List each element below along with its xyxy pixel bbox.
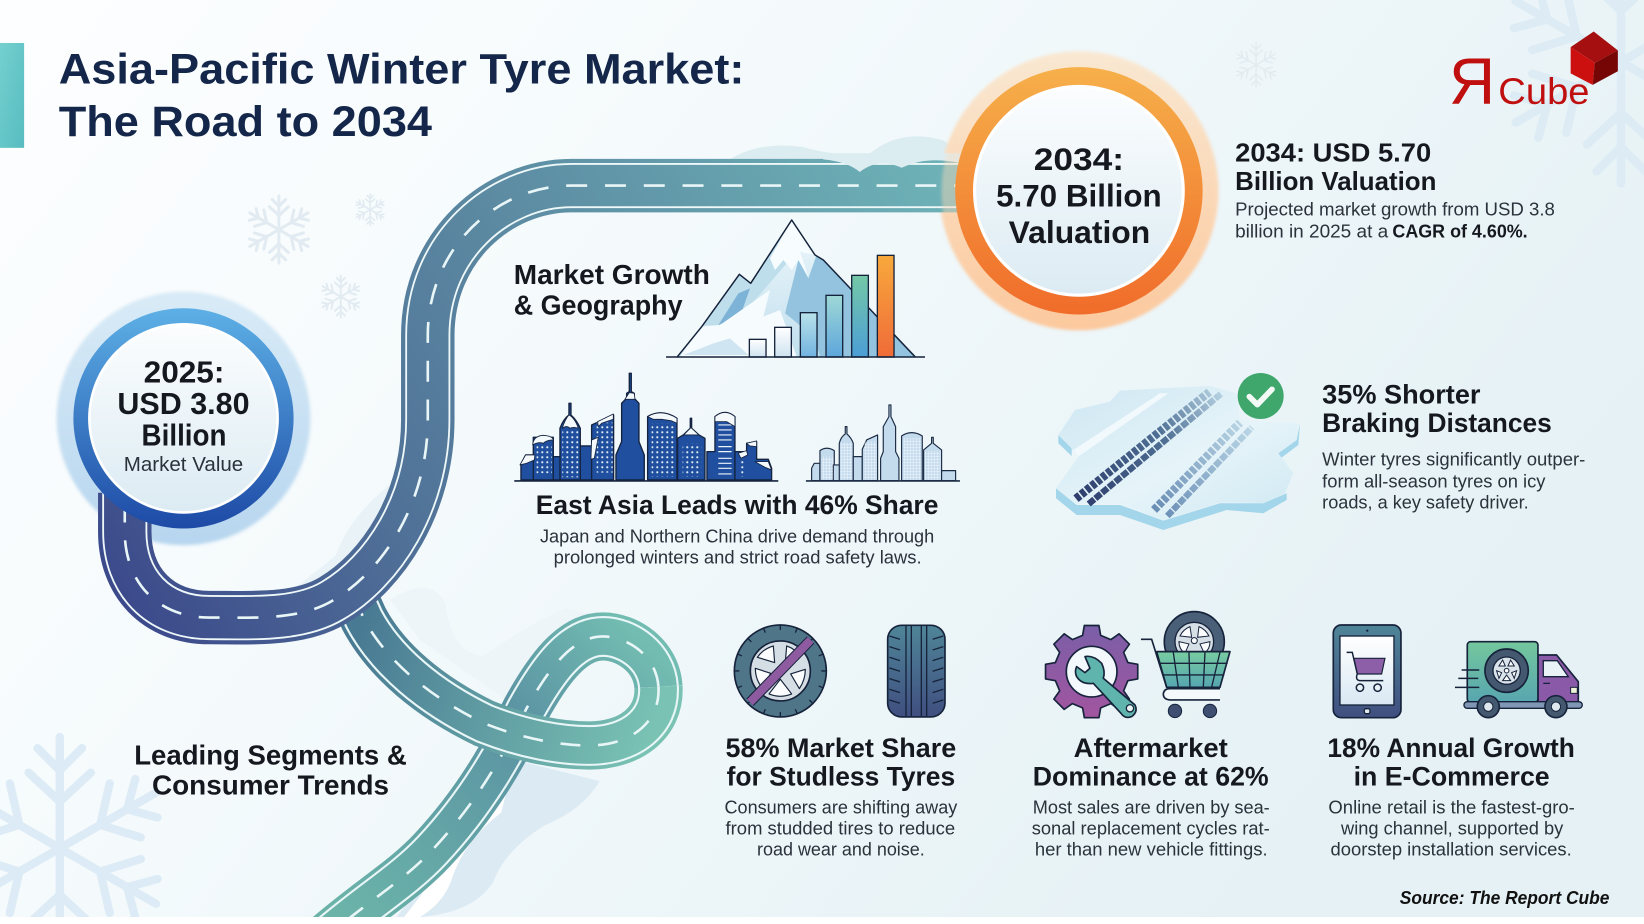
bottom white strip [0, 917, 1644, 924]
text block: 2034 valuation [1235, 137, 1555, 241]
logo: Я [1449, 44, 1495, 118]
logo: Cube [1498, 71, 1590, 112]
text block: e-commerce: wing channel, supported by [1340, 818, 1564, 839]
icon: delivery truck with tyre [1455, 642, 1582, 718]
icon: snowflake bottom left [0, 737, 172, 924]
icon: snowflake small 4 [1234, 43, 1278, 87]
icon: light blue skyline [806, 405, 960, 481]
text block: 2034 valuation: Projected market growth from USD 3.8 [1235, 198, 1555, 219]
milestone circle: 2034: 5.70 Billion [996, 179, 1162, 214]
text block: e-commerce: 18% Annual Growth [1327, 733, 1575, 763]
logo [1449, 31, 1618, 118]
heading: market growth [514, 259, 710, 321]
text block: aftermarket: her than new vehicle fittings. [1035, 839, 1268, 860]
icon: snowflake small 1 [245, 196, 313, 263]
text block: studless tyres [725, 733, 958, 860]
text block: studless tyres: from studded tires to reduce [726, 818, 955, 839]
text block: braking distances: Braking Distances [1322, 408, 1552, 438]
source note: Source: The Report Cube [1400, 887, 1609, 908]
text block: studless tyres: 58% Market Share [726, 733, 956, 763]
text block: 2034 valuation: CAGR of 4.60%. [1392, 220, 1528, 241]
road: lower segment with tail and loop top [325, 636, 658, 924]
text block: e-commerce: in E-Commerce [1354, 761, 1550, 791]
text block: aftermarket [1032, 733, 1270, 860]
text block: studless tyres: for Studless Tyres [727, 761, 955, 791]
text block: east asia: prolonged winters and strict road safety laws. [554, 547, 922, 568]
text block: braking distances: 35% Shorter [1322, 380, 1480, 410]
milestone circle: 2025: Market Value [124, 454, 243, 476]
milestone circle: 2025: 2025: [144, 356, 224, 390]
icon: shopping cart with tyre [1141, 612, 1230, 718]
heading: market growth: Market Growth [514, 259, 710, 290]
milestone circle: 2034: Valuation [1009, 215, 1150, 250]
text block: aftermarket: Aftermarket [1074, 733, 1228, 763]
text block: braking distances: Winter tyres significantly outper- [1322, 449, 1585, 470]
milestone circle: 2034: 2034: [1034, 142, 1124, 177]
icon: snowflake small 3 [320, 276, 362, 318]
title [59, 45, 744, 146]
snow over road [823, 153, 963, 172]
icon: dark blue snowy skyline [514, 373, 778, 481]
text block: aftermarket: sonal replacement cycles rat- [1032, 818, 1270, 839]
halo: 2025 glow [57, 291, 310, 545]
chart: mountain with rising bars [666, 220, 925, 357]
icon: snowflake small 2 [354, 194, 386, 225]
road: upper section from 2025 to 2034 [125, 186, 975, 618]
icon: snowflake top right [1499, 0, 1644, 183]
text block: east asia: Japan and Northern China drive demand through [540, 526, 934, 547]
text block: east asia: East Asia Leads with 46% Share [536, 490, 938, 520]
icon: gear and wrench [1046, 626, 1138, 718]
icon: studded tyre crossed out [734, 625, 826, 717]
milestone circle: 2025: Billion [142, 419, 226, 453]
heading: leading segments: Leading Segments & [134, 739, 407, 770]
snow drifts [241, 136, 980, 917]
halo: 2034 glow [939, 51, 1218, 330]
milestone circle: 2025: USD 3.80 [117, 387, 250, 421]
heading: leading segments: Consumer Trends [152, 770, 389, 801]
road: middle sweep into loop [354, 598, 659, 745]
title: The Road to 2034 [59, 98, 432, 146]
icon: tablet with cart [1333, 625, 1401, 718]
text block: e-commerce [1327, 733, 1575, 860]
heading: leading segments [134, 739, 407, 801]
heading: market growth: & Geography [514, 290, 683, 321]
text block: 2034 valuation: Billion Valuation [1235, 166, 1436, 196]
text block: braking distances [1322, 380, 1585, 513]
text block: braking distances: form all-season tyres on icy [1322, 471, 1546, 492]
text block: aftermarket: Dominance at 62% [1033, 761, 1269, 791]
icon: studless tyre tread [888, 625, 945, 717]
text block: studless tyres: road wear and noise. [757, 839, 925, 860]
milestone circle: 2025 [73, 308, 294, 528]
text block: studless tyres: Consumers are shifting away [725, 797, 958, 818]
text block: 2034 valuation: billion in 2025 at a [1235, 220, 1389, 241]
text block: e-commerce: Online retail is the fastest-gro- [1328, 797, 1575, 818]
title: Asia-Pacific Winter Tyre Market: [59, 45, 744, 93]
text block: aftermarket: Most sales are driven by sea- [1033, 797, 1270, 818]
milestone circle: 2034 [942, 53, 1216, 328]
accent bar [0, 43, 24, 148]
text block: 2034 valuation: 2034: USD 5.70 [1235, 137, 1431, 167]
text block: east asia [536, 490, 938, 568]
icon: ice sheet with tyre tracks and check [1056, 373, 1300, 530]
text block: braking distances: roads, a key safety driver. [1322, 492, 1529, 513]
text block: e-commerce: doorstep installation services. [1331, 839, 1572, 860]
